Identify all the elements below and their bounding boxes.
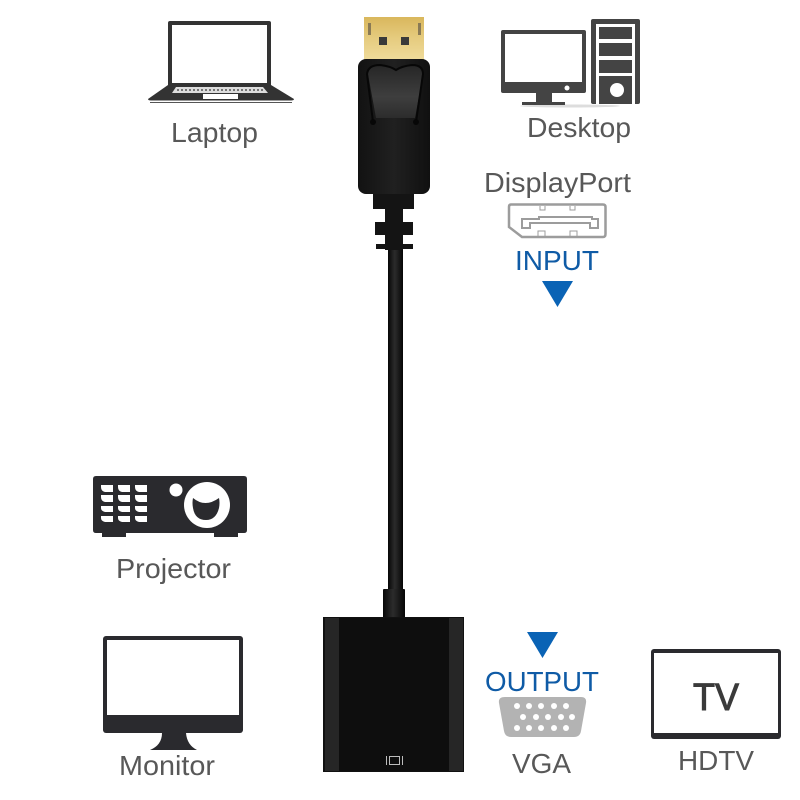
VGA box collar (383, 589, 405, 618)
label: DisplayPort: DisplayPort (484, 167, 631, 198)
arrow: output down (527, 632, 558, 658)
cable cord (388, 245, 403, 593)
label: Desktop: Desktop (527, 112, 631, 143)
icon: TV: TV (693, 677, 740, 719)
icon: projector (93, 476, 247, 537)
label: VGA: VGA (512, 748, 571, 779)
monitor port symbol (386, 756, 402, 765)
label: HDTV: HDTV (678, 745, 754, 776)
icon: VGA connector (499, 697, 586, 737)
icon: TV (651, 649, 781, 739)
DisplayPort to VGA adapter cable (323, 17, 464, 772)
strain relief ribs (373, 194, 414, 250)
arrow: input down (542, 281, 573, 307)
label: Monitor: Monitor (119, 750, 215, 781)
icon: laptop (148, 21, 294, 103)
icon: desktop computer (501, 19, 640, 108)
label: INPUT: INPUT (515, 245, 599, 276)
icon: monitor (103, 636, 243, 750)
label: Laptop: Laptop (171, 117, 258, 148)
label: Projector: Projector (116, 553, 231, 584)
label: OUTPUT: OUTPUT (485, 666, 599, 697)
DisplayPort gold plug (364, 17, 424, 61)
VGA adapter box (323, 617, 464, 772)
DisplayPort connector housing (358, 59, 430, 194)
icon: DisplayPort socket (509, 204, 606, 237)
